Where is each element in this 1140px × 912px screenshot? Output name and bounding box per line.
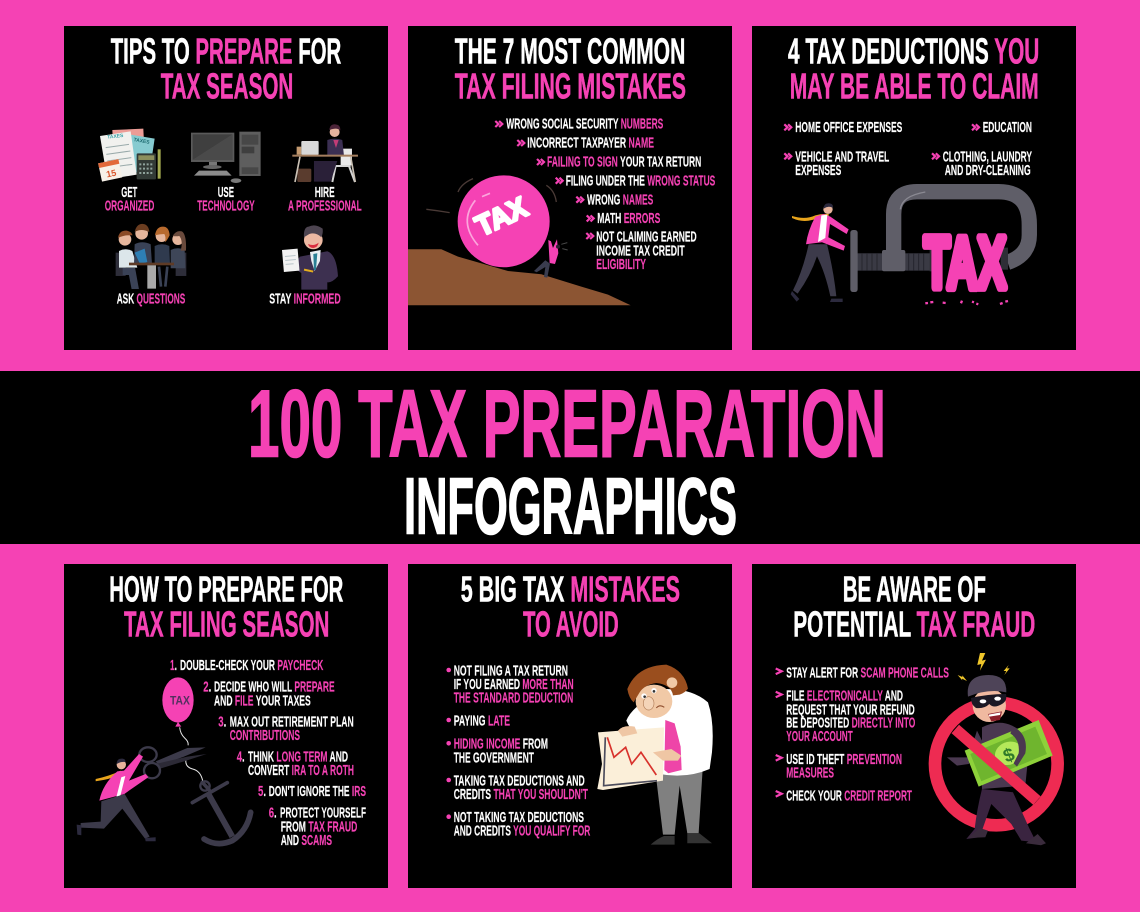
heading: tips to prepare: TAX SEASON [161,65,293,106]
text: get organized: GET [121,185,137,201]
list: mistakes to avoid: NOT FILING A TAX RETURN [454,663,568,679]
list: numbered preparation steps: PROTECT YOURSELF [280,805,366,821]
icon: tax papers and calculator [98,129,161,182]
list: numbered preparation steps: MAX OUT RETIREMENT PLAN [230,714,354,730]
icon: professional at desk [292,124,358,182]
icon: tax papers and calculator: TAXES [133,137,151,146]
list: numbered preparation steps: 6. [269,805,277,821]
list: numbered preparation steps: FROM TAX FRAUD [281,819,357,835]
icon: team meeting [116,224,186,289]
list: deductions: EXPENSES [795,163,841,179]
text: hire a professional: A PROFESSIONAL [288,199,362,215]
illustration: man stopping tax ball on hill [408,175,631,305]
list: filing mistakes: FILING UNDER THE WRONG STATUS [566,173,715,189]
list: numbered preparation steps: DOUBLE-CHECK YOUR PAYCHECK [180,658,324,674]
heading: 4 tax deductions [788,30,1039,106]
illustration: man stopping tax ball on hill: TAX [471,191,533,243]
list: fraud precautions: REQUEST THAT YOUR REFUND [786,702,915,718]
subtitle: infographics: INFOGRAPHICS [404,462,737,550]
panel: tips to prepare for tax season [64,26,388,350]
list: numbered preparation steps: 3. [218,714,226,730]
list: numbered preparation steps: 1. [170,658,177,674]
list: filing mistakes: WRONG SOCIAL SECURITY NUMBERS [506,117,663,133]
list: fraud precautions: CHECK YOUR CREDIT REPORT [786,788,912,804]
illustration: man cutting balloon from anchor: TAX [170,693,190,707]
illustration: man cutting balloon from anchor [77,677,251,844]
text: stay informed: STAY INFORMED [269,292,341,308]
list: numbered preparation steps: AND SCAMS [281,833,332,849]
heading: how to prepare: TAX FILING SEASON [124,603,329,644]
list: fraud precautions: FILE ELECTRONICALLY AND [786,689,903,705]
list: numbered preparation steps: 5. [258,784,266,800]
list: fraud precautions: USE ID THEFT PREVENTION [786,752,902,768]
heading: how to prepare: HOW TO PREPARE FOR [109,568,343,609]
list: mistakes to avoid: IF YOU EARNED MORE THAN [454,677,574,693]
list: mistakes to avoid: CREDITS THAT YOU SHOULDN'T [454,787,588,803]
list: numbered preparation steps: 2. [203,680,211,696]
list: numbered preparation steps: THINK LONG TERM AND [248,749,348,765]
text: ask questions: ASK QUESTIONS [117,292,185,308]
list: fraud precautions: BE DEPOSITED DIRECTLY INTO [786,716,915,732]
heading: 5 big tax mistakes [461,568,680,644]
heading: potential tax fraud [793,568,1035,644]
list: deductions: VEHICLE AND TRAVEL [795,149,889,165]
list: mistakes to avoid: NOT TAKING TAX DEDUCTIONS [454,810,584,826]
text: use technology: USE [218,185,234,201]
list: filing mistakes: NOT CLAIMING EARNED [596,230,697,246]
list: deductions: EDUCATION [983,120,1032,136]
list: deductions: HOME OFFICE EXPENSES [795,120,902,136]
list: deductions: CLOTHING, LAUNDRY [943,149,1032,165]
text: hire a professional [288,185,362,215]
illustration: sad man with falling chart [597,665,713,845]
heading: potential tax fraud: POTENTIAL TAX FRAUD [793,603,1035,644]
list: numbered preparation steps: CONVERT IRA TO A ROTH [248,763,354,779]
panel: be aware of potential tax fraud [752,564,1076,888]
icon: businessman with clipboard [282,225,338,290]
illustration: thief with money in prohibition sign: $ [1000,743,1018,767]
list: fraud precautions [776,666,949,804]
heading: tips to prepare [111,30,341,106]
text: use technology [197,185,255,215]
list: filing mistakes: FAILING TO SIGN YOUR TAX RETURN [547,155,701,171]
heading: tips to prepare: TIPS TO PREPARE FOR [111,30,341,71]
icon: tax papers and calculator: TAXES [107,133,124,141]
panel: 4 tax deductions [752,26,1076,350]
list: mistakes to avoid: AND CREDITS YOU QUALIFY FOR [454,823,591,839]
heading: 4 tax deductions: 4 TAX DEDUCTIONS YOU [788,30,1039,71]
icon: desktop computer [191,132,261,183]
list: fraud precautions: MEASURES [786,765,834,781]
heading: how to prepare [109,568,343,644]
list: deductions: AND DRY-CLEANING [945,163,1031,179]
banner: main title [0,370,1140,550]
panel: 7 most common tax filing mistakes [408,26,732,350]
list: mistakes to avoid: HIDING INCOME FROM [454,737,548,753]
list: filing mistakes: MATH ERRORS [597,211,660,227]
heading: 7 most common: TAX FILING MISTAKES [455,65,686,106]
text: use technology: TECHNOLOGY [197,199,255,215]
list: numbered preparation steps: DECIDE WHO WILL PREPARE [214,680,335,696]
list: fraud precautions: YOUR ACCOUNT [786,729,853,745]
list: filing mistakes [495,117,715,273]
heading: 7 most common [455,30,686,106]
heading: 5 big tax mistakes: 5 BIG TAX MISTAKES [461,568,680,609]
list: mistakes to avoid: PAYING LATE [454,714,510,730]
panel: how to prepare for tax filing season [64,564,388,888]
list: filing mistakes: ELIGIBILITY [596,257,646,273]
text: get organized: ORGANIZED [105,199,154,215]
list: fraud precautions: STAY ALERT FOR SCAM PHONE CALLS [786,666,949,682]
list: filing mistakes: INCORRECT TAXPAYER NAME [527,136,654,152]
icon: tax papers and calculator: 15 [105,168,117,180]
illustration: clamp squeezing tax [791,192,1029,304]
list: filing mistakes: WRONG NAMES [587,192,653,208]
list: deductions [784,120,1032,179]
illustration: clamp squeezing tax: TAX [924,222,1006,303]
text: get organized [105,185,154,215]
list: filing mistakes: INCOME TAX CREDIT [596,243,685,259]
panel: 5 big tax mistakes [408,564,732,888]
heading: 7 most common: THE 7 MOST COMMON [455,30,685,71]
list: numbered preparation steps [170,658,366,849]
list: numbered preparation steps: CONTRIBUTIONS [230,728,300,744]
list: mistakes to avoid: THE STANDARD DEDUCTION [454,691,573,707]
heading: 5 big tax mistakes: TO AVOID [523,603,619,644]
list: mistakes to avoid: TAKING TAX DEDUCTIONS AND [454,773,585,789]
illustration: thief with money in prohibition sign [935,653,1058,845]
heading: potential tax fraud: BE AWARE OF [843,568,986,609]
text: hire a professional: HIRE [315,185,335,201]
list: numbered preparation steps: DON'T IGNORE THE IRS [269,784,366,800]
list: numbered preparation steps: 4. [237,749,245,765]
list: mistakes to avoid [446,663,591,839]
list: mistakes to avoid: THE GOVERNMENT [454,750,534,766]
list: numbered preparation steps: AND FILE YOUR TAXES [214,693,311,709]
